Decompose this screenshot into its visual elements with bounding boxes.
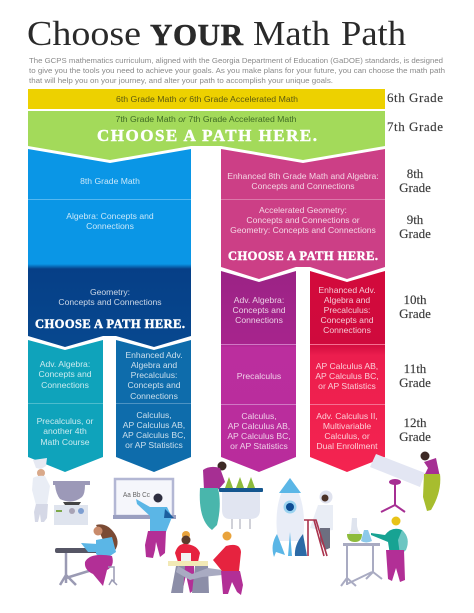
panel: teal path <box>28 340 103 472</box>
panel: red path: Multivariable <box>323 421 371 431</box>
panel: 6th grade bar <box>28 89 385 109</box>
panel: teal path: Concepts and <box>38 369 92 379</box>
grade labels <box>387 90 443 444</box>
panel: teal path: another 4th <box>43 426 87 436</box>
panel: purple path: Calculus, <box>241 411 277 421</box>
panel: left path 8th and 9th grade: Algebra: Concepts and <box>66 211 154 221</box>
panel: purple path: Adv. Algebra: <box>234 295 284 305</box>
panel: dark blue path: or AP Statistics <box>125 440 183 450</box>
panel: purple path: Concepts and <box>232 305 286 315</box>
icon: rocket <box>273 478 307 557</box>
panel: pink path: Geometry: Concepts and Connections <box>230 225 376 235</box>
panel: 7th grade arrow <box>28 111 385 160</box>
panel: pink path: Concepts and Connections or <box>246 215 360 225</box>
panel: dark blue path: Precalculus: <box>131 370 177 380</box>
panel: red path: Adv. Calculus II, <box>316 411 378 421</box>
panel: teal path: Adv. Algebra: <box>40 359 90 369</box>
panel: left path geometry: CHOOSE A PATH HERE. <box>35 317 185 331</box>
panel: red path: Connections <box>323 325 371 335</box>
panel: left path geometry: Concepts and Connections <box>58 297 162 307</box>
panel: dark blue path: AP Calculus AB, <box>123 420 185 430</box>
panel: pink path: Concepts and Connections <box>251 181 355 191</box>
panel: pink path: CHOOSE A PATH HERE. <box>228 249 378 263</box>
grade labels: Grade <box>399 429 431 444</box>
grade labels: 10th <box>403 292 427 307</box>
icon: gardener at planter table <box>200 462 263 530</box>
intro text <box>29 56 445 85</box>
panel: teal path: Precalculus, or <box>37 416 94 426</box>
panel: red path: Concepts and <box>320 315 374 325</box>
panel: purple path: Precalculus <box>237 371 281 381</box>
icon: chemist at table with flasks <box>341 516 408 586</box>
panel: dark blue path: Calculus, <box>136 410 172 420</box>
title: Math <box>253 14 331 53</box>
icon: astronaut on ladder <box>304 490 333 556</box>
panel: purple path: AP Calculus BC, <box>227 431 291 441</box>
panel: purple path: or AP Statistics <box>230 441 288 451</box>
title <box>27 14 407 53</box>
panel: red path: or AP Statistics <box>318 381 376 391</box>
panel: teal path: Math Course <box>40 437 90 447</box>
panel: 6th grade bar: 6th Grade Math or 6th Grade Accelerated Math <box>116 95 298 104</box>
grade labels: 12th <box>403 415 427 430</box>
icon: team around table <box>168 531 243 595</box>
panel: left path 8th and 9th grade <box>28 149 191 268</box>
icon: student at desk with tablet <box>55 524 118 586</box>
panel: left path 8th and 9th grade: 8th Grade Math <box>80 176 140 186</box>
panel: purple path: Connections <box>235 315 283 325</box>
panel: red path: Dual Enrollment <box>316 441 378 451</box>
icon: chef with pot <box>32 458 90 525</box>
panel: dark blue path: Enhanced Adv. <box>125 350 183 360</box>
panel: red path: Algebra and <box>324 295 370 305</box>
panel: dark blue path <box>116 340 191 472</box>
grade labels: Grade <box>399 306 431 321</box>
panel: 7th grade arrow: CHOOSE A PATH HERE. <box>97 126 317 145</box>
panel: dark blue path: Connections <box>130 391 178 401</box>
panel: teal path: Connections <box>41 380 89 390</box>
panel: dark blue path: AP Calculus BC, <box>122 430 186 440</box>
grade labels: 8th <box>407 166 424 181</box>
panel: left path geometry <box>28 264 191 347</box>
panel: pink path <box>221 149 385 279</box>
grade labels: 6th Grade <box>387 90 443 105</box>
icon: teacher at whiteboard: Aa Bb Cc <box>123 492 150 499</box>
panel: red path: AP Calculus BC, <box>315 371 379 381</box>
grade labels: 7th Grade <box>387 119 443 134</box>
intro text: to give you the tools you need to achieve your goals. As you make plans for your future, you can choose the math path <box>29 66 445 75</box>
icon: teacher at whiteboard <box>113 479 176 558</box>
grade labels: 11th <box>404 361 427 376</box>
panel: left path geometry: Geometry: <box>90 287 130 297</box>
panel: pink path: Enhanced 8th Grade Math and Algebra: <box>227 171 379 181</box>
panel: pink path: Accelerated Geometry: <box>259 205 347 215</box>
panel: 7th grade arrow: 7th Grade Math or 7th Grade Accelerated Math <box>116 115 296 124</box>
grade labels: Grade <box>399 375 431 390</box>
grade labels: 9th <box>407 212 424 227</box>
panel: red path: Precalculus: <box>324 305 370 315</box>
panel: purple path: AP Calculus AB, <box>228 421 290 431</box>
panel: dark blue path: Algebra and <box>131 360 177 370</box>
panel: dark blue path: Concepts and <box>127 380 181 390</box>
grade labels: Grade <box>399 180 431 195</box>
title: Choose <box>27 14 141 53</box>
panel: purple path <box>221 271 296 472</box>
intro text: that will help you on your journey, and alter your path to accomplish your unique goals. <box>29 76 333 85</box>
panel: red path: AP Calculus AB, <box>316 361 378 371</box>
intro text: The GCPS mathematics curriculum, aligned with the Georgia Department of Education (GaDOE) standards, is designed <box>29 56 443 65</box>
title: YOUR <box>150 17 244 52</box>
icon: scientist with telescope <box>370 452 440 512</box>
grade labels: Grade <box>399 226 431 241</box>
panel: left path 8th and 9th grade: Connections <box>86 221 134 231</box>
panel: red path: Calculus, or <box>324 431 370 441</box>
panel: red path <box>310 271 385 472</box>
panel: red path: Enhanced Adv. <box>318 285 376 295</box>
title: Path <box>341 14 407 53</box>
